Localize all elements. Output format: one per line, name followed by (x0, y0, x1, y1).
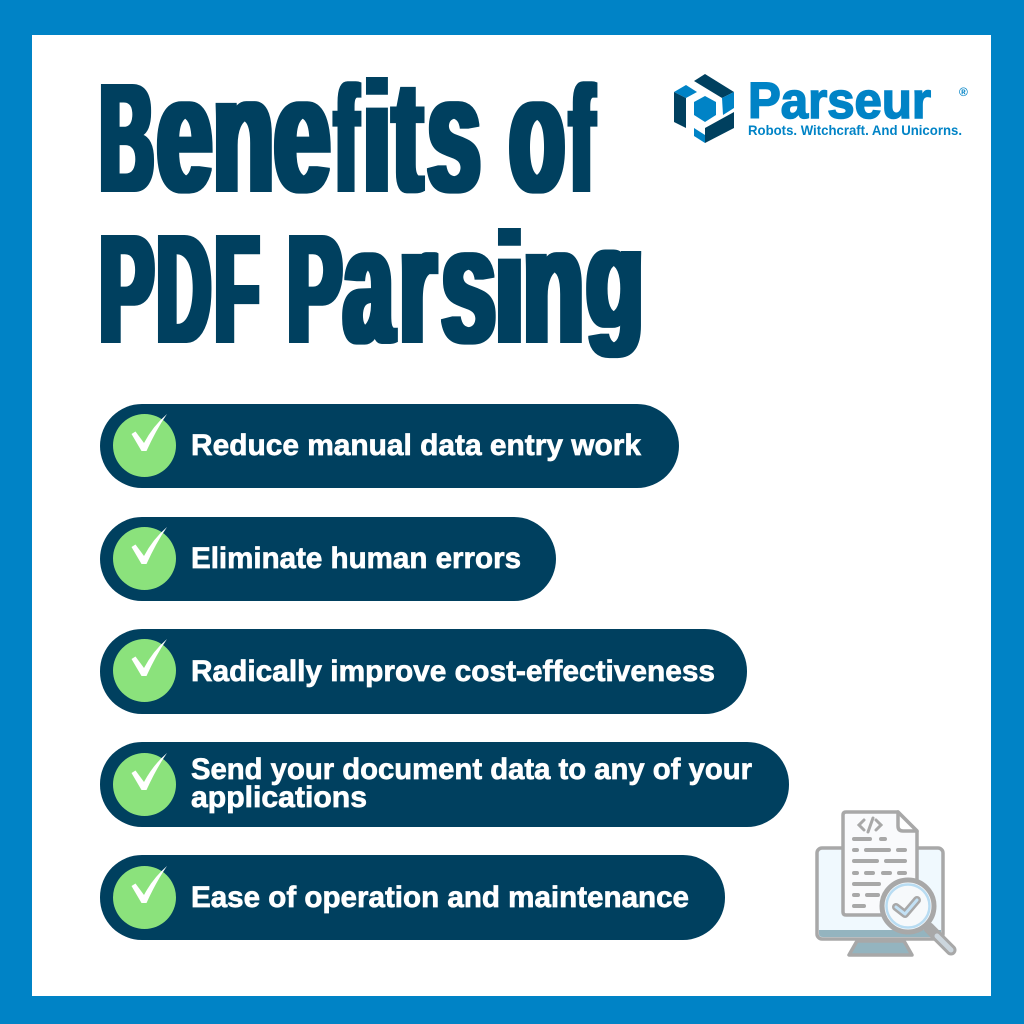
benefit text 1: Reduce manual data entry work (191, 429, 642, 462)
benefit text 2: Eliminate human errors (191, 542, 521, 575)
title: r (399, 193, 436, 377)
icon: check badge 2 (113, 527, 176, 590)
title: e (274, 42, 330, 226)
magnifier handle (929, 928, 951, 950)
registered mark: ® (959, 85, 968, 99)
benefit pill 1 (100, 404, 679, 488)
title: o (510, 42, 564, 226)
title: n (523, 193, 584, 377)
benefit pill 3 (100, 629, 747, 714)
document (843, 812, 917, 915)
icon: monitor with document and magnifier (817, 812, 951, 955)
benefit pill 2 (100, 517, 556, 601)
logo tagline: Robots. Witchcraft. And Unicorns. (748, 122, 962, 138)
benefit pill 5 (100, 855, 725, 940)
monitor stand (849, 941, 912, 955)
benefit text 4 (191, 753, 753, 814)
logo wordmark: Parseur (748, 72, 931, 129)
magnifier lens (882, 880, 934, 932)
title: f (570, 55, 594, 223)
title: P (288, 203, 342, 375)
title: t (393, 49, 422, 225)
title: i (363, 51, 391, 225)
benefit text 5: Ease of operation and maintenance (191, 881, 689, 914)
title: i (494, 202, 525, 376)
title: B (100, 52, 153, 224)
title: P (100, 203, 154, 375)
icon: hexagon logo mark (674, 74, 734, 143)
icon: check badge 4 (113, 753, 176, 816)
benefit text 4: applications (191, 781, 367, 814)
title: g (586, 199, 644, 358)
benefit text 4: Send your document data to any of your (191, 753, 753, 786)
document code lines (854, 818, 905, 906)
title: s (442, 193, 496, 377)
title (100, 42, 644, 377)
benefit pill 4 (100, 742, 789, 827)
title: a (344, 193, 394, 377)
benefit text 3: Radically improve cost-effectiveness (191, 655, 715, 688)
title: F (215, 203, 259, 375)
title: s (428, 42, 480, 226)
title: f (335, 55, 358, 223)
monitor (817, 848, 943, 939)
title: D (157, 203, 211, 375)
title: e (157, 42, 212, 226)
icon: check badge 5 (113, 866, 176, 929)
icon: check badge 3 (113, 639, 176, 702)
magnifier check (896, 900, 917, 914)
icon: check badge 1 (113, 414, 176, 477)
logo: Parseur (674, 72, 968, 143)
title: n (213, 42, 274, 226)
